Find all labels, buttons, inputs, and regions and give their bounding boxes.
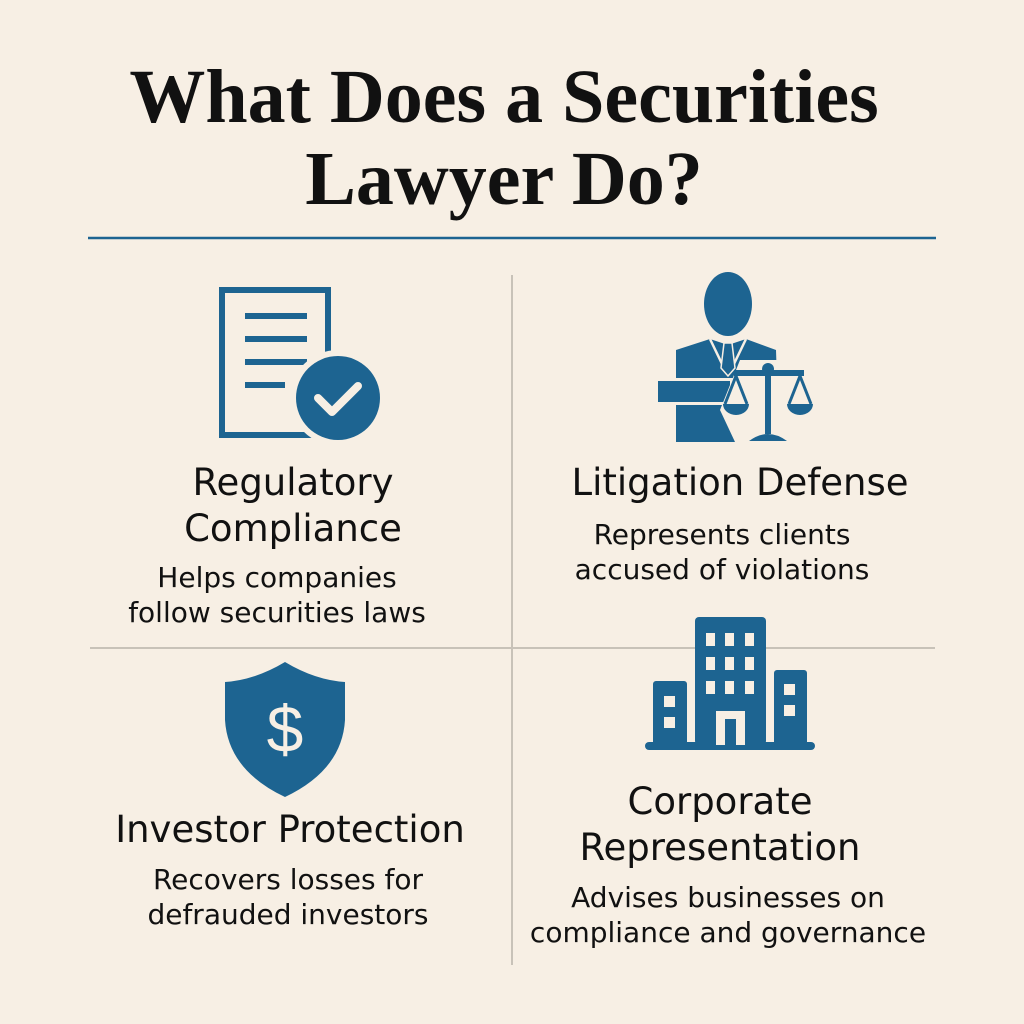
heading: corporate representation: Representation <box>579 826 860 869</box>
text: litigation body: Represents clients <box>594 518 850 551</box>
text: corporate body <box>530 881 926 949</box>
text: investor body <box>147 863 429 931</box>
icon: shield with dollar <box>225 662 345 797</box>
text: regulatory body: follow securities laws <box>128 596 426 629</box>
icon: office buildings <box>645 617 815 750</box>
heading: investor protection: Investor Protection <box>115 808 465 851</box>
text: regulatory body: Helps companies <box>157 561 397 594</box>
title: Lawyer Do? <box>305 137 703 221</box>
heading: litigation defense: Litigation Defense <box>571 461 908 504</box>
text: regulatory body <box>128 561 426 629</box>
title <box>129 55 879 221</box>
heading: corporate representation <box>579 780 860 869</box>
text: investor body: Recovers losses for <box>153 863 423 896</box>
text: litigation body <box>575 518 869 586</box>
title: What Does a Securities <box>129 55 879 139</box>
text: investor body: defrauded investors <box>147 898 429 931</box>
text: litigation body: accused of violations <box>575 553 869 586</box>
text: corporate body: Advises businesses on <box>571 881 885 914</box>
heading: regulatory compliance <box>184 461 402 550</box>
icon: shield with dollar: $ <box>267 692 303 766</box>
icon: lawyer with scales <box>658 272 815 442</box>
heading: regulatory compliance: Regulatory <box>193 461 393 504</box>
heading: regulatory compliance: Compliance <box>184 507 402 550</box>
icon: document with check <box>222 290 386 446</box>
heading: corporate representation: Corporate <box>628 780 812 823</box>
text: corporate body: compliance and governance <box>530 916 926 949</box>
